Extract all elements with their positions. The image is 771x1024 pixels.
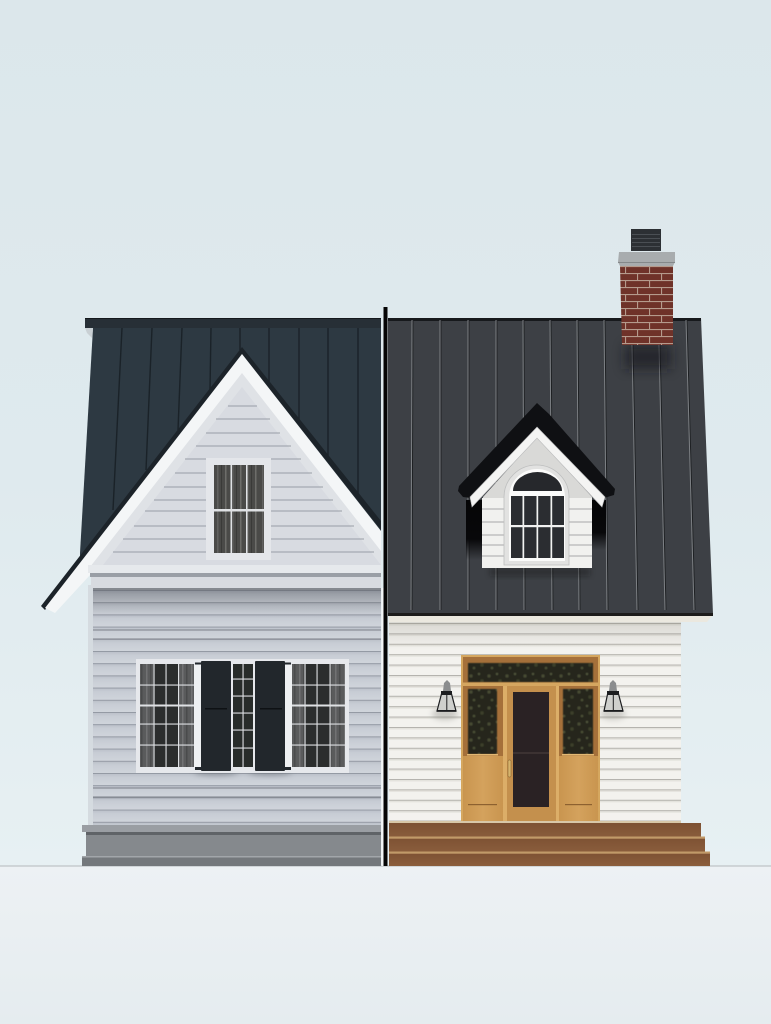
left lower wall: grey siding bbox=[88, 585, 381, 825]
gable: white trim bbox=[45, 354, 381, 613]
soffit bbox=[389, 616, 712, 622]
right lower wall: cream siding bbox=[389, 620, 681, 823]
left roof: dark standing seam bbox=[80, 318, 381, 560]
right half: modern house bbox=[388, 229, 713, 866]
door assembly bbox=[461, 655, 600, 823]
right sidelight bbox=[559, 686, 598, 822]
front door bbox=[507, 686, 556, 822]
transom glass bbox=[468, 663, 593, 682]
gable: siding bbox=[103, 387, 381, 565]
left wall lantern bbox=[432, 680, 458, 720]
chimney bbox=[618, 229, 675, 345]
right window sash bbox=[292, 664, 345, 767]
central divider line bbox=[382, 307, 388, 866]
dormer body bbox=[482, 437, 592, 568]
dormer roof bbox=[458, 403, 615, 498]
left window sash bbox=[140, 664, 194, 767]
right roof: charcoal standing seam bbox=[388, 318, 713, 616]
right wall lantern bbox=[600, 680, 626, 720]
door handle bbox=[508, 760, 511, 777]
gable: inner trim bbox=[90, 373, 381, 567]
stone foundation bbox=[82, 825, 381, 866]
dormer shadows bbox=[466, 500, 606, 576]
right shutter bbox=[255, 661, 291, 771]
dormer arched window bbox=[504, 465, 569, 565]
ground bbox=[0, 866, 771, 1024]
chimney shadow on roof bbox=[625, 345, 671, 369]
gable: horizontal bands bbox=[88, 565, 381, 590]
left half: traditional house bbox=[41, 318, 381, 866]
lower window group with shutters bbox=[136, 659, 349, 776]
gable: dark ridge edge bbox=[41, 347, 381, 610]
porch steps bbox=[389, 821, 710, 866]
centre window sash bbox=[233, 664, 253, 767]
gable window bbox=[206, 458, 271, 560]
dormer white trim bbox=[470, 427, 605, 507]
left shutter bbox=[195, 661, 231, 771]
left sidelight bbox=[463, 686, 503, 822]
white strips bbox=[194, 665, 292, 768]
